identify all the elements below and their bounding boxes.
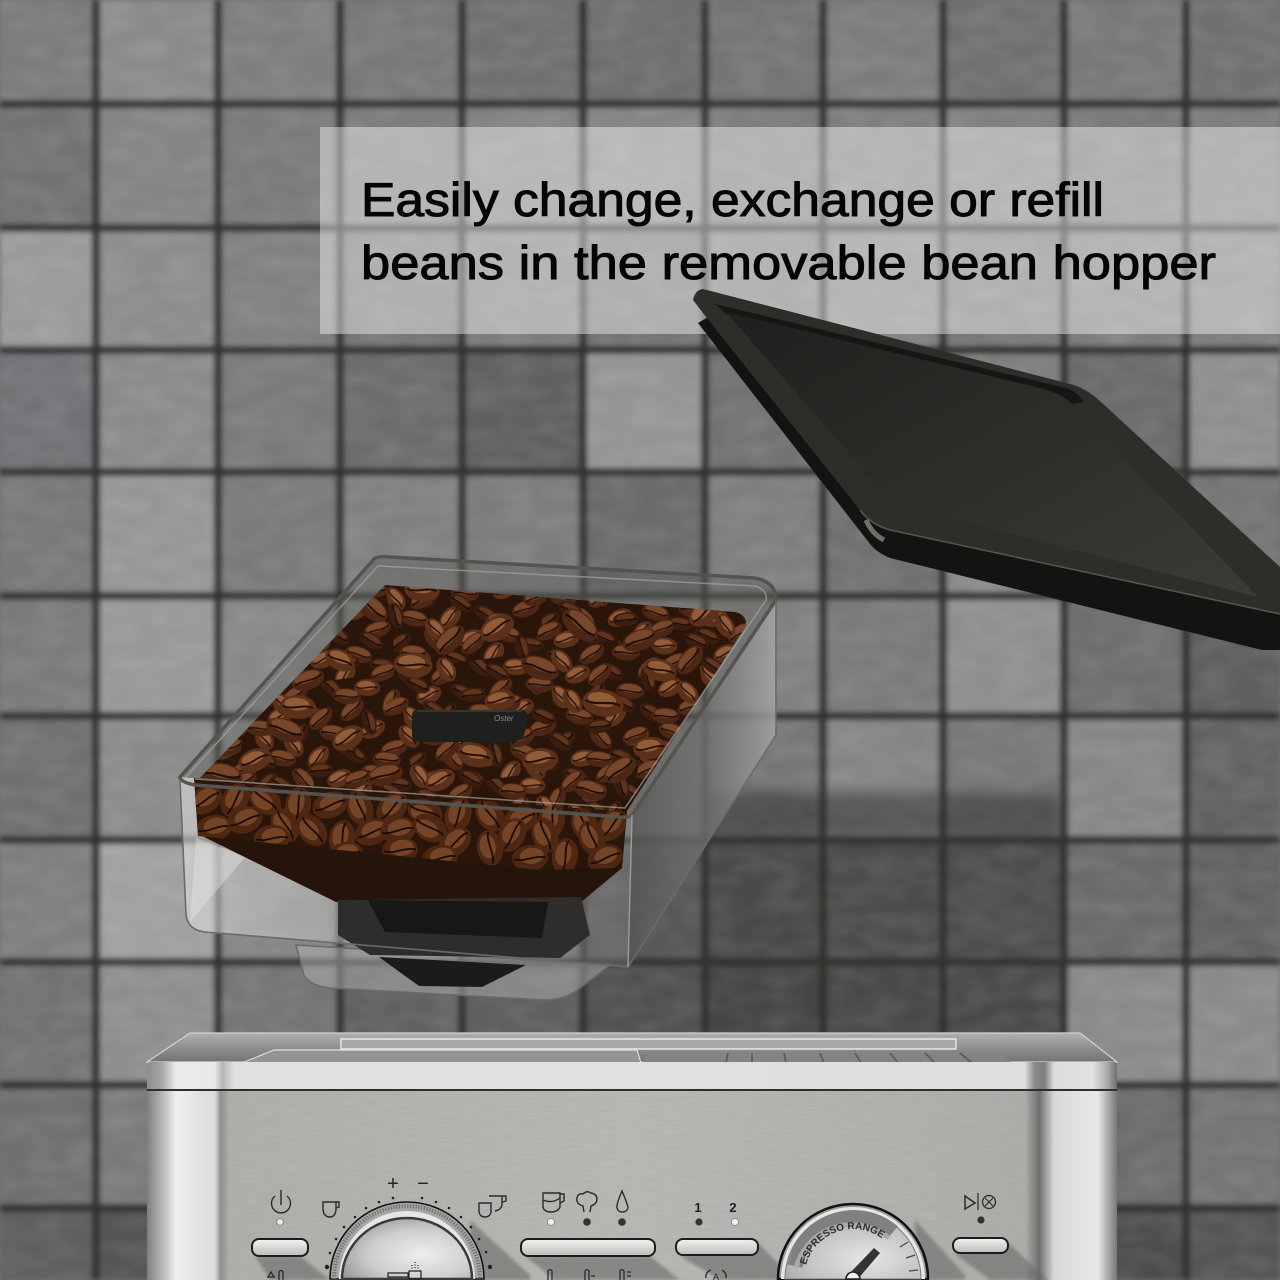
plus minus labels [387, 1173, 429, 1195]
strength dial [325, 1197, 492, 1279]
plus minus labels: + [387, 1173, 399, 1195]
larger surface beans [199, 577, 727, 804]
hopper body glass [180, 557, 776, 967]
icon: single cup [323, 1202, 339, 1217]
power control [252, 1190, 308, 1256]
wall shadow band [700, 792, 1060, 840]
coffee beans inside [183, 577, 746, 987]
plus minus labels: − [417, 1173, 429, 1195]
heading text [361, 173, 1216, 289]
bean hopper [180, 557, 776, 1000]
heading text: beans in the removable bean hopper [361, 236, 1216, 289]
pressure gauge [776, 1202, 930, 1280]
top tray recess [147, 1033, 1117, 1063]
icon: portafilter [388, 1262, 421, 1279]
hopper rim [180, 557, 776, 967]
heading text: Easily change, exchange or refill [361, 173, 1104, 226]
top band [147, 1062, 1117, 1090]
start stop control [953, 1193, 1008, 1253]
machine top [145, 1032, 1118, 1280]
gauge label: ESPRESSO RANGE [800, 1222, 886, 1264]
black hopper tab: Oster [494, 714, 514, 723]
lid of bean hopper [693, 289, 1280, 650]
button shadows [255, 1220, 1048, 1280]
cup count controls: 2 [729, 1200, 737, 1215]
icon: double cup [479, 1196, 506, 1217]
icon: steam cloud [577, 1192, 597, 1212]
funnel and black dispenser [198, 834, 622, 987]
cup count controls [676, 1200, 758, 1255]
brew controls [521, 1191, 655, 1256]
cup count controls: 1 [694, 1200, 702, 1215]
callout: translucent text panel [320, 127, 1280, 334]
icon: mug [543, 1193, 564, 1212]
front beans through glass [194, 778, 627, 870]
black hopper tab [412, 710, 528, 742]
icon: water drop [617, 1191, 628, 1212]
hopper lower base [296, 945, 610, 1000]
lower panel icons [268, 1270, 726, 1280]
indicator lights [547, 1218, 626, 1226]
machine body [147, 1088, 1117, 1280]
